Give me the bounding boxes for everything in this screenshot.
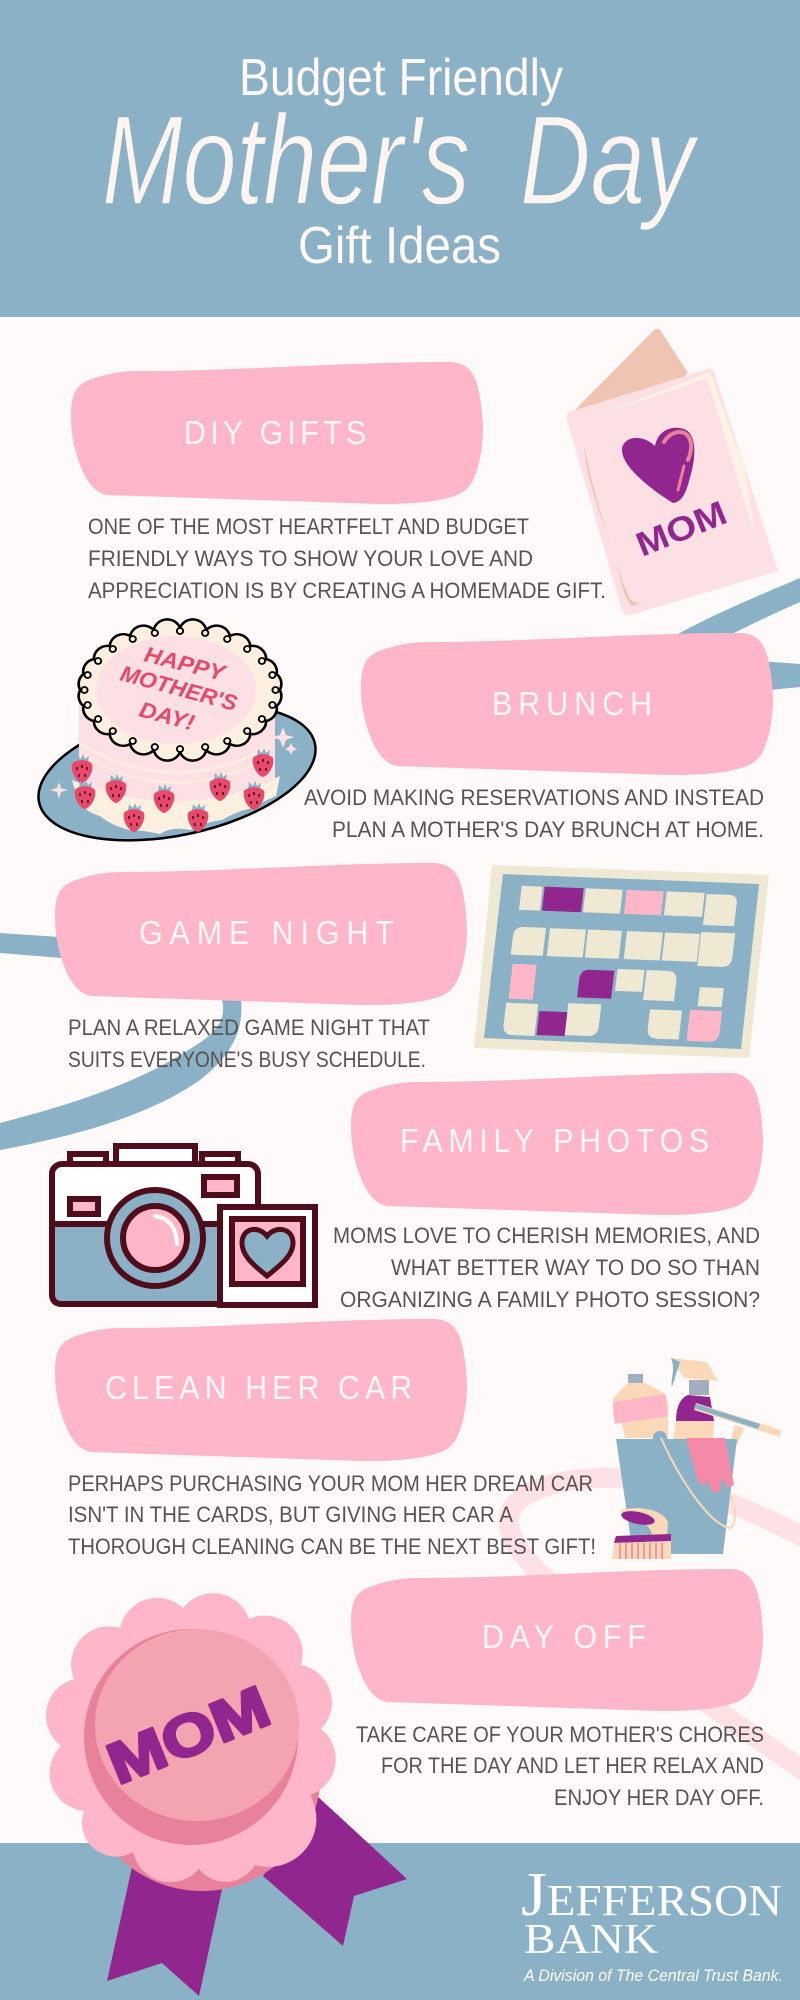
text: game night: SUITS EVERYONE'S BUSY SCHEDULE.: [68, 1047, 426, 1072]
logo: Jefferson Bank: [521, 1861, 783, 1985]
card text: MOM: [631, 494, 732, 564]
bucket: [616, 1439, 737, 1554]
text: brunch: [304, 785, 764, 842]
bucket handle: [661, 1438, 735, 1528]
pill: family photos: [351, 1073, 763, 1215]
logo: Jefferson Bank: BANK: [524, 1917, 658, 1963]
text: game night: PLAN A RELAXED GAME NIGHT THAT: [68, 1015, 430, 1040]
cake lettering: [118, 642, 240, 735]
icon: greeting card: [567, 329, 778, 615]
rosette petals: [46, 1593, 336, 1882]
panel: brunch: [304, 633, 773, 842]
icon: board game: [474, 865, 769, 1058]
pill: DIY gifts: [71, 362, 483, 504]
cake top: [79, 619, 281, 761]
glove: [686, 1438, 734, 1492]
text: day off: ENJOY HER DAY OFF.: [554, 1785, 764, 1810]
text: day off: FOR THE DAY AND LET HER RELAX AND: [381, 1753, 764, 1778]
text: clean her car: ISN'T IN THE CARDS, BUT GIVING HER CAR A: [68, 1502, 513, 1527]
heart: [622, 428, 694, 503]
text: clean her car: PERHAPS PURCHASING YOUR MOM HER DREAM CAR: [68, 1471, 593, 1496]
plate: [26, 683, 328, 863]
header band: [0, 0, 800, 317]
text: family photos: ORGANIZING A FAMILY PHOTO SESSION?: [340, 1287, 760, 1312]
icon: MOM rosette: [46, 1593, 407, 1996]
blue ribbon top right: [668, 578, 800, 691]
text: DIY gifts: [88, 514, 606, 603]
title: Mother's: [102, 89, 470, 231]
cake lettering: MOTHER'S: [118, 661, 240, 716]
footer band: [0, 1843, 800, 2000]
icon: cake: [26, 619, 328, 863]
pill: game night: [55, 863, 467, 1005]
text: clean her car: [68, 1471, 596, 1559]
panel: day off: [351, 1569, 764, 1810]
text: family photos: WHAT BETTER WAY TO DO SO THAN: [391, 1255, 760, 1280]
blue ribbon left: [0, 933, 241, 1150]
text: game night: [68, 1015, 430, 1072]
sparkles: [50, 727, 297, 799]
text: family photos: [333, 1223, 760, 1312]
panel: clean her car: [55, 1319, 596, 1559]
text: brunch: PLAN A MOTHER'S DAY BRUNCH AT HOME.: [332, 817, 764, 842]
text: DIY gifts: ONE OF THE MOST HEARTFELT AND BUDGET: [88, 514, 529, 539]
panel: family photos: [333, 1073, 763, 1312]
cake lettering: HAPPY: [142, 642, 230, 686]
pill: brunch: [361, 633, 773, 775]
title: Budget Friendly: [239, 49, 563, 107]
logo: Jefferson Bank: A Division of The Central Trust Bank.: [523, 1966, 783, 1985]
icon: cleaning bucket: [612, 1358, 781, 1559]
text: DIY gifts: FRIENDLY WAYS TO SHOW YOUR LOVE AND: [88, 546, 533, 571]
heading: day off: DAY OFF: [482, 1618, 646, 1655]
heading: DIY gifts: DIY GIFTS: [184, 414, 366, 451]
pill: clean her car: [55, 1319, 467, 1461]
strawberries: [72, 748, 273, 832]
heading: brunch: BRUNCH: [492, 685, 652, 722]
cake body: [79, 700, 275, 812]
bottle: [613, 1374, 668, 1438]
light pink ribbon: [508, 1478, 800, 1775]
photo frame: [220, 1207, 315, 1305]
brush: [612, 1508, 671, 1559]
spray bottle: [671, 1358, 718, 1440]
squeegee: [694, 1403, 781, 1445]
rosette text: MOM: [99, 1674, 279, 1797]
text: DIY gifts: APPRECIATION IS BY CREATING A HOMEMADE GIFT.: [88, 578, 606, 603]
heading: clean her car: CLEAN HER CAR: [105, 1369, 412, 1406]
text: family photos: MOMS LOVE TO CHERISH MEMORIES, AND: [333, 1223, 760, 1248]
text: day off: TAKE CARE OF YOUR MOTHER'S CHORES: [356, 1722, 764, 1747]
title: [102, 49, 699, 275]
cake lettering: DAY!: [137, 697, 197, 735]
heading: game night: GAME NIGHT: [139, 914, 394, 951]
title: Day: [520, 89, 699, 231]
title: Gift Ideas: [298, 217, 501, 275]
panel: DIY gifts: [71, 362, 606, 603]
text: clean her car: THOROUGH CLEANING CAN BE THE NEXT BEST GIFT!: [68, 1534, 596, 1559]
ribbon tails: [107, 1795, 407, 1996]
logo: Jefferson Bank: JEFFERSON: [521, 1861, 782, 1929]
icon: camera: [52, 1146, 315, 1305]
panel: game night: [55, 863, 467, 1072]
frosting: [72, 776, 280, 834]
heading: family photos: FAMILY PHOTOS: [400, 1122, 709, 1159]
text: day off: [356, 1722, 764, 1810]
pill: day off: [351, 1569, 763, 1711]
text: brunch: AVOID MAKING RESERVATIONS AND INSTEAD: [304, 785, 764, 810]
